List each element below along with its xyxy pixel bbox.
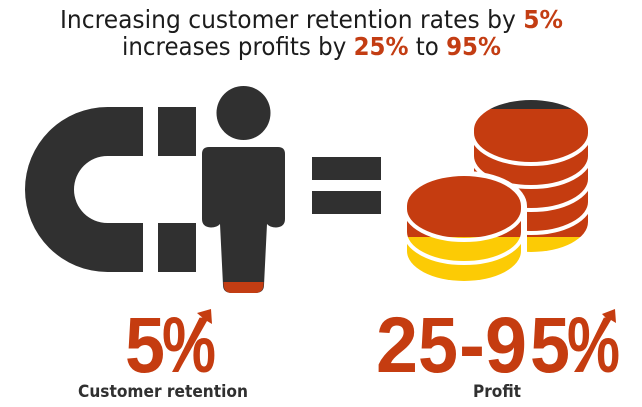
- stat: profit 25-95%: 5: [418, 300, 458, 389]
- stat: profit 25-95%: -: [459, 300, 485, 389]
- stat: profit 25-95%: [376, 300, 620, 389]
- title: [60, 5, 563, 61]
- icon: magnet: [25, 107, 196, 272]
- stat: profit 25-95%: 5: [530, 300, 570, 389]
- icon: customer figure: [202, 86, 285, 293]
- label: customer retention: Customer retention: [78, 382, 248, 401]
- title: Increasing customer retention rates by 5%: [60, 5, 563, 34]
- stat: profit 25-95%: 2: [376, 300, 418, 389]
- label: profit: Profit: [473, 382, 521, 401]
- arrow: retention up: [172, 309, 212, 372]
- stat: customer retention 5%: [125, 300, 216, 389]
- stat: profit 25-95%: 9: [485, 300, 527, 389]
- title: increases profits by 25% to 95%: [122, 32, 501, 61]
- icon: coin stacks: [407, 100, 588, 281]
- icon: equals sign: [312, 157, 381, 214]
- arrow: profit up: [574, 309, 616, 372]
- stat: profit 25-95%: %: [567, 300, 620, 389]
- stat: customer retention 5%: %: [162, 300, 216, 389]
- stat: customer retention 5%: 5: [125, 300, 165, 389]
